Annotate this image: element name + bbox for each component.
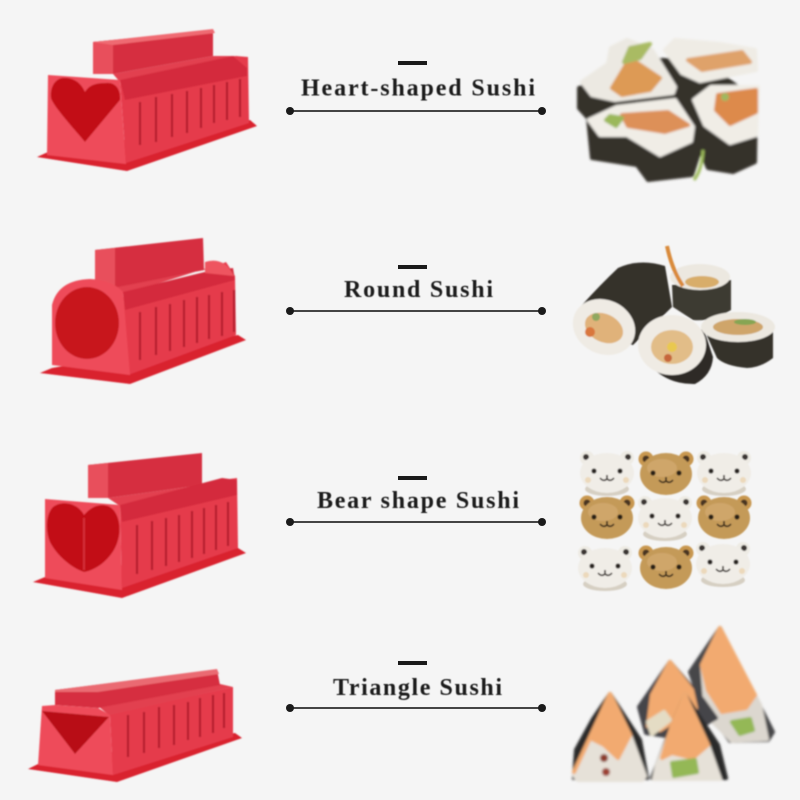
icon: round cavity (55, 287, 119, 359)
mold: triangle (28, 669, 242, 782)
dash above heading (398, 476, 427, 480)
heading: Round Sushi: Round Sushi (344, 277, 493, 303)
photo: round sushi rolls (564, 246, 775, 384)
row: heart-shaped sushi (37, 29, 758, 180)
row: bear shape sushi (33, 451, 752, 598)
connector line (286, 307, 546, 315)
connector line (286, 107, 546, 115)
photo: triangle sushi (574, 628, 773, 780)
connector line (286, 704, 546, 712)
mold: heart-shaped (37, 29, 257, 171)
row: triangle sushi (28, 628, 773, 782)
icon: heart cavity (51, 78, 120, 142)
icon: bear cavity (47, 503, 120, 572)
row: round sushi (40, 238, 775, 384)
connector line (286, 518, 546, 526)
photo: bear-shaped rice balls (578, 451, 752, 591)
heading: Heart-shaped Sushi: Heart-shaped Sushi (301, 76, 535, 102)
icon: triangle cavity (42, 711, 109, 754)
photo: heart-shaped sushi rolls (579, 40, 758, 180)
dash above heading (398, 661, 427, 665)
heading: Bear shape Sushi: Bear shape Sushi (317, 488, 519, 514)
dash above heading (398, 265, 427, 269)
dash above heading (398, 61, 427, 65)
mold: bear shape (33, 453, 246, 598)
mold: round (40, 238, 246, 384)
heading: Triangle Sushi: Triangle Sushi (333, 675, 502, 701)
